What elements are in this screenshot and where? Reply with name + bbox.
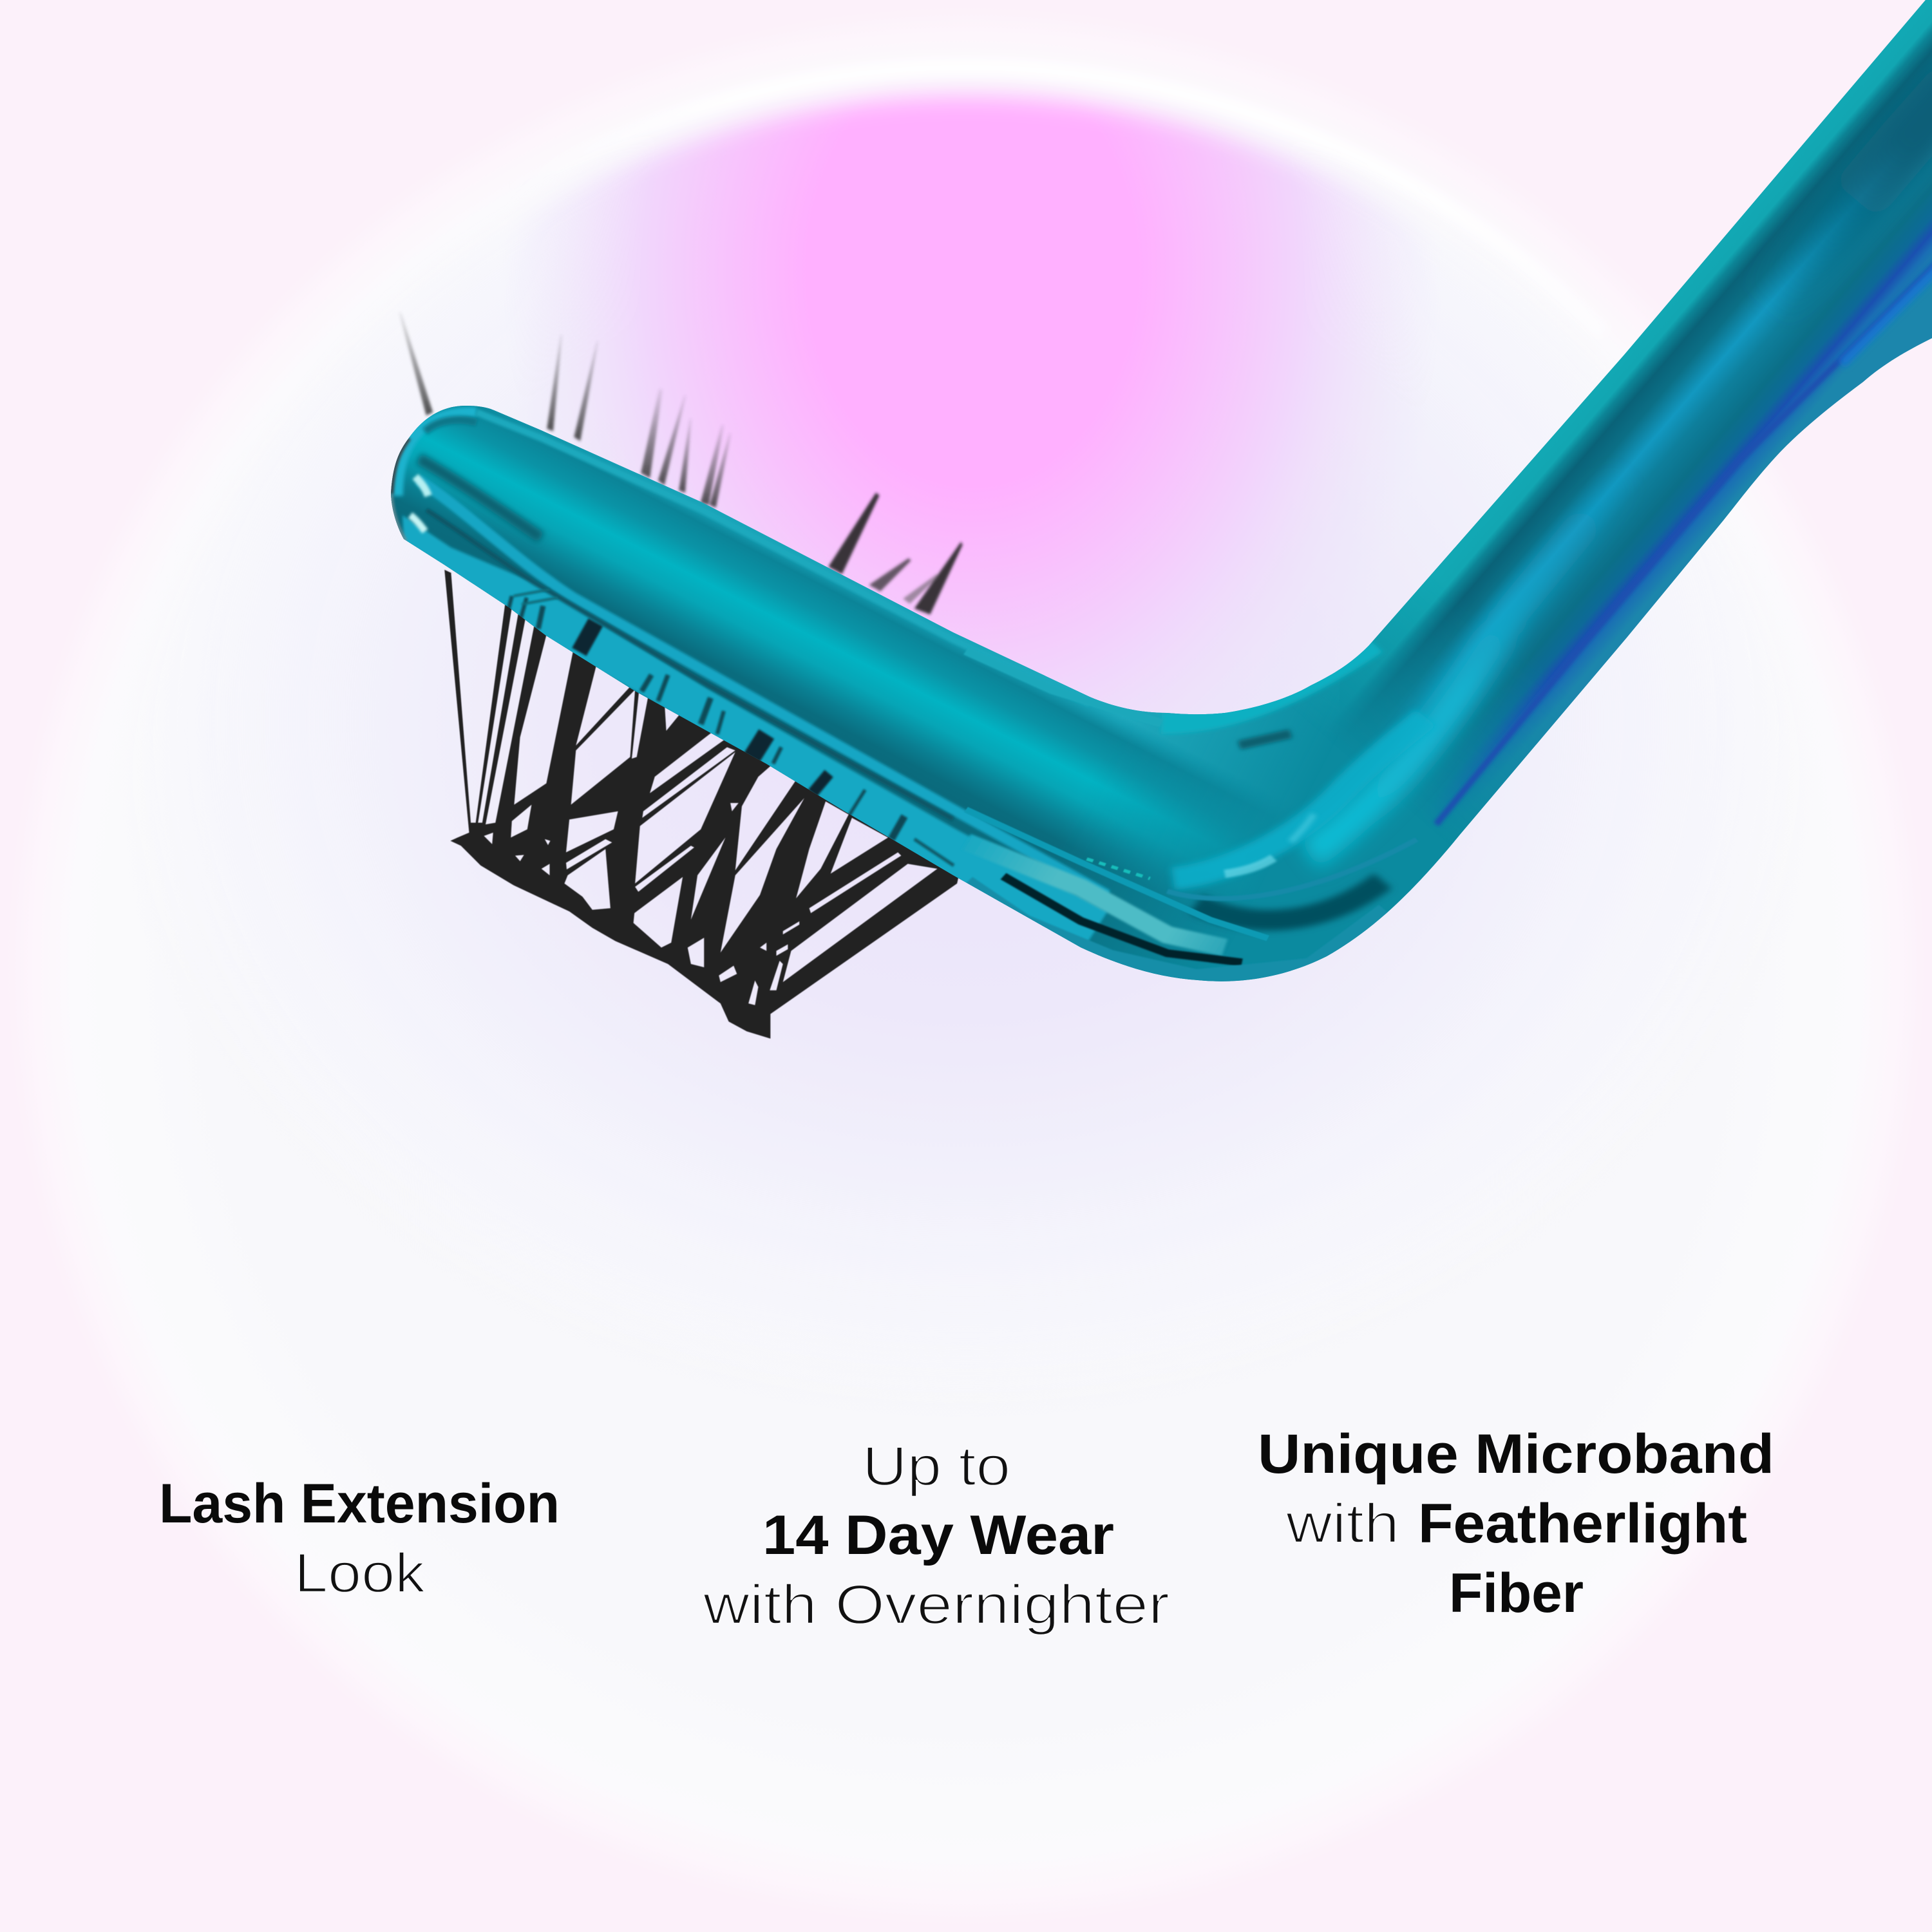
applicator base colour (374, 0, 1932, 1005)
text: Unique Microband with Featherlight Fiber (1258, 1423, 1774, 1624)
handle darkening near the top (1779, 74, 1932, 292)
text: Up to 14 Day Wear with Overnighter (703, 1435, 1170, 1636)
text: Lash Extension Look (159, 1473, 560, 1604)
text: Up to 14 Day Wear with Overnighter: Up to (862, 1435, 1010, 1497)
translucent lash strip along the arm (402, 515, 1108, 953)
tip details (391, 412, 1108, 895)
text: Unique Microband with Featherlight Fiber: Fiber (1449, 1562, 1584, 1624)
lower false lash cluster (444, 570, 960, 1039)
handle gradient (1336, 0, 1932, 822)
text: Lash Extension Look: Lash Extension (159, 1473, 560, 1535)
text: Unique Microband with Featherlight Fiber: Featherlight (1418, 1493, 1747, 1555)
text: Up to 14 Day Wear with Overnighter: 14 Day Wear (762, 1504, 1114, 1566)
text: Lash Extension Look: Look (294, 1542, 426, 1604)
lash bases visible through the strip (507, 589, 954, 866)
bend detail (966, 644, 1426, 978)
teal applicator tool (374, 0, 1932, 1005)
text: Up to 14 Day Wear with Overnighter: with Overnighter (703, 1574, 1170, 1636)
text: Unique Microband with Featherlight Fiber: with (1285, 1493, 1399, 1555)
arm gradient (391, 406, 1293, 975)
handle lit band and blue reflection (1309, 171, 1932, 855)
upper lashes above the applicator (399, 313, 963, 614)
text: Unique Microband with Featherlight Fiber: Unique Microband (1258, 1423, 1774, 1485)
